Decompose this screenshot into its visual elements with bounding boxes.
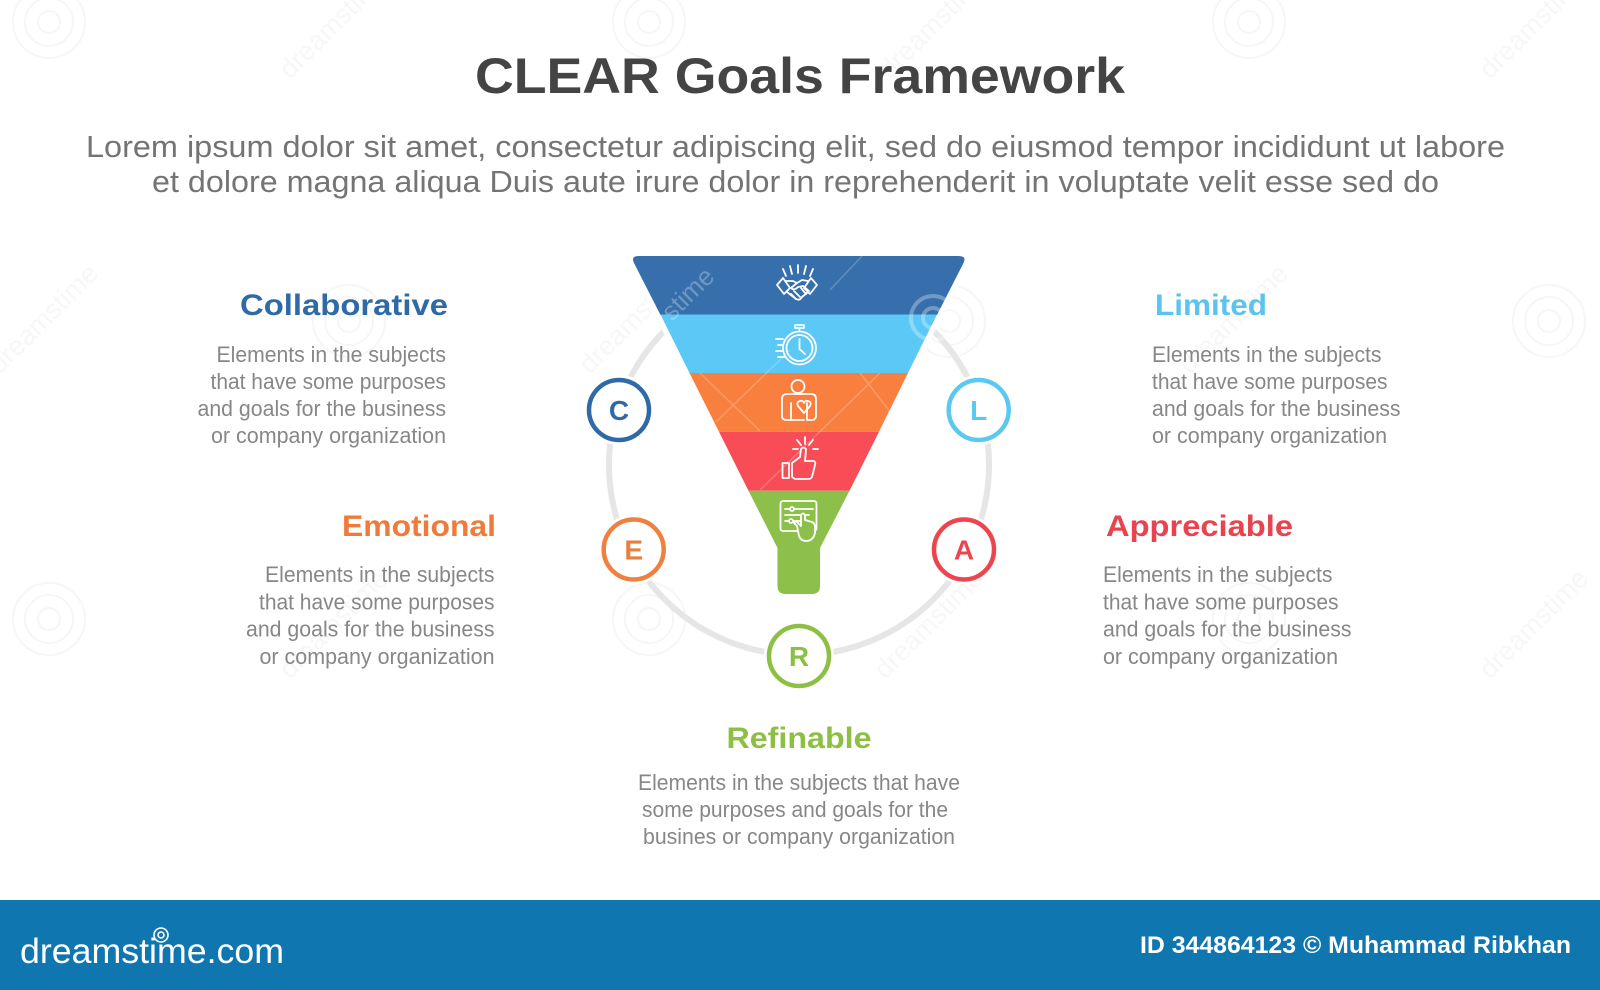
circle badge: R: R <box>789 641 809 672</box>
circle badge: A: A <box>954 534 974 566</box>
text block: Emotional: that have some purposes <box>259 590 494 614</box>
text block: Appreciable: that have some purposes <box>1103 590 1338 614</box>
text block: Limited: or company organization <box>1152 423 1387 448</box>
funnel layer: appreciable <box>719 432 879 491</box>
circle badge: L: L <box>970 395 987 426</box>
icon: stopwatch <box>776 325 816 364</box>
icon: person with heart <box>782 380 816 420</box>
funnel layer: emotional <box>690 373 908 432</box>
ring behind funnel <box>609 275 989 655</box>
text block: Emotional: Elements in the subjects <box>265 562 494 587</box>
circle badge: C: C <box>609 395 629 426</box>
subtitle text <box>86 129 1505 199</box>
circle badge: E: E <box>624 534 643 566</box>
watermark over funnel: stime <box>655 261 720 326</box>
text block: Collaborative: that have some purposes <box>210 369 446 394</box>
footer band <box>0 900 1600 990</box>
circle badge: L <box>944 375 1014 445</box>
circle badge: R <box>764 621 834 691</box>
text block: Appreciable: Appreciable <box>1106 510 1293 543</box>
text block: Emotional: Emotional <box>342 510 496 543</box>
icon: thumbs up <box>782 437 818 479</box>
text block: Emotional <box>246 510 496 669</box>
watermark background: dreamstime <box>1473 563 1594 684</box>
title: CLEAR Goals Framework <box>475 48 1125 104</box>
text block: Collaborative: Elements in the subjects <box>216 342 446 367</box>
text block: Appreciable: Elements in the subjects <box>1103 562 1332 587</box>
text block: Emotional: or company organization <box>260 644 494 669</box>
text block: Refinable <box>638 722 960 849</box>
text block: Limited: Elements in the subjects <box>1152 342 1382 367</box>
text block: Refinable: Refinable <box>726 722 872 755</box>
circle badge: A <box>929 514 999 584</box>
watermark background: dreamstime <box>868 563 989 684</box>
footer logo spiral <box>154 928 168 942</box>
text block: Limited: Limited <box>1155 289 1267 322</box>
watermark over funnel <box>655 256 955 490</box>
text block: Collaborative: Collaborative <box>240 289 448 322</box>
funnel diagram <box>633 256 965 594</box>
circle badge: C <box>584 375 654 445</box>
watermark background: dreamstime <box>573 258 694 379</box>
text block: Limited: and goals for the business <box>1152 396 1400 421</box>
text block: Appreciable: and goals for the business <box>1103 616 1352 642</box>
watermark background <box>0 0 1594 684</box>
subtitle text: Lorem ipsum dolor sit amet, consectetur adipiscing elit, sed do eiusmod tempor incididunt ut labore <box>86 129 1505 164</box>
text block: Refinable: Elements in the subjects that have <box>638 770 960 795</box>
text block: Appreciable <box>1103 510 1352 669</box>
watermark background: dreamstime <box>273 563 394 684</box>
subtitle text: et dolore magna aliqua Duis aute irure dolor in reprehenderit in voluptate velit esse sed do <box>152 164 1439 199</box>
text block: Collaborative <box>198 289 448 448</box>
text block: Collaborative: or company organization <box>211 423 446 448</box>
footer logo text: dreamstime.com <box>20 932 284 971</box>
funnel layer: refinable <box>748 491 850 594</box>
watermark background: dreamstime <box>1173 258 1294 379</box>
funnel layer: collaborative <box>633 256 965 315</box>
text block: Emotional: and goals for the business <box>246 616 494 642</box>
text block: Collaborative: and goals for the business <box>198 396 446 421</box>
text block: Appreciable: or company organization <box>1103 644 1338 669</box>
text block: Refinable: some purposes and goals for the <box>642 797 948 822</box>
text block: Refinable: busines or company organization <box>643 824 955 849</box>
funnel layer: limited <box>660 314 937 373</box>
footer credit: ID 344864123 © Muhammad Ribkhan <box>1140 932 1571 959</box>
circle badge: E <box>599 514 669 584</box>
text block: Limited: that have some purposes <box>1152 369 1388 394</box>
text block: Limited <box>1152 289 1400 448</box>
icon: control panel with hand <box>780 501 816 541</box>
icon: handshake <box>777 265 817 300</box>
